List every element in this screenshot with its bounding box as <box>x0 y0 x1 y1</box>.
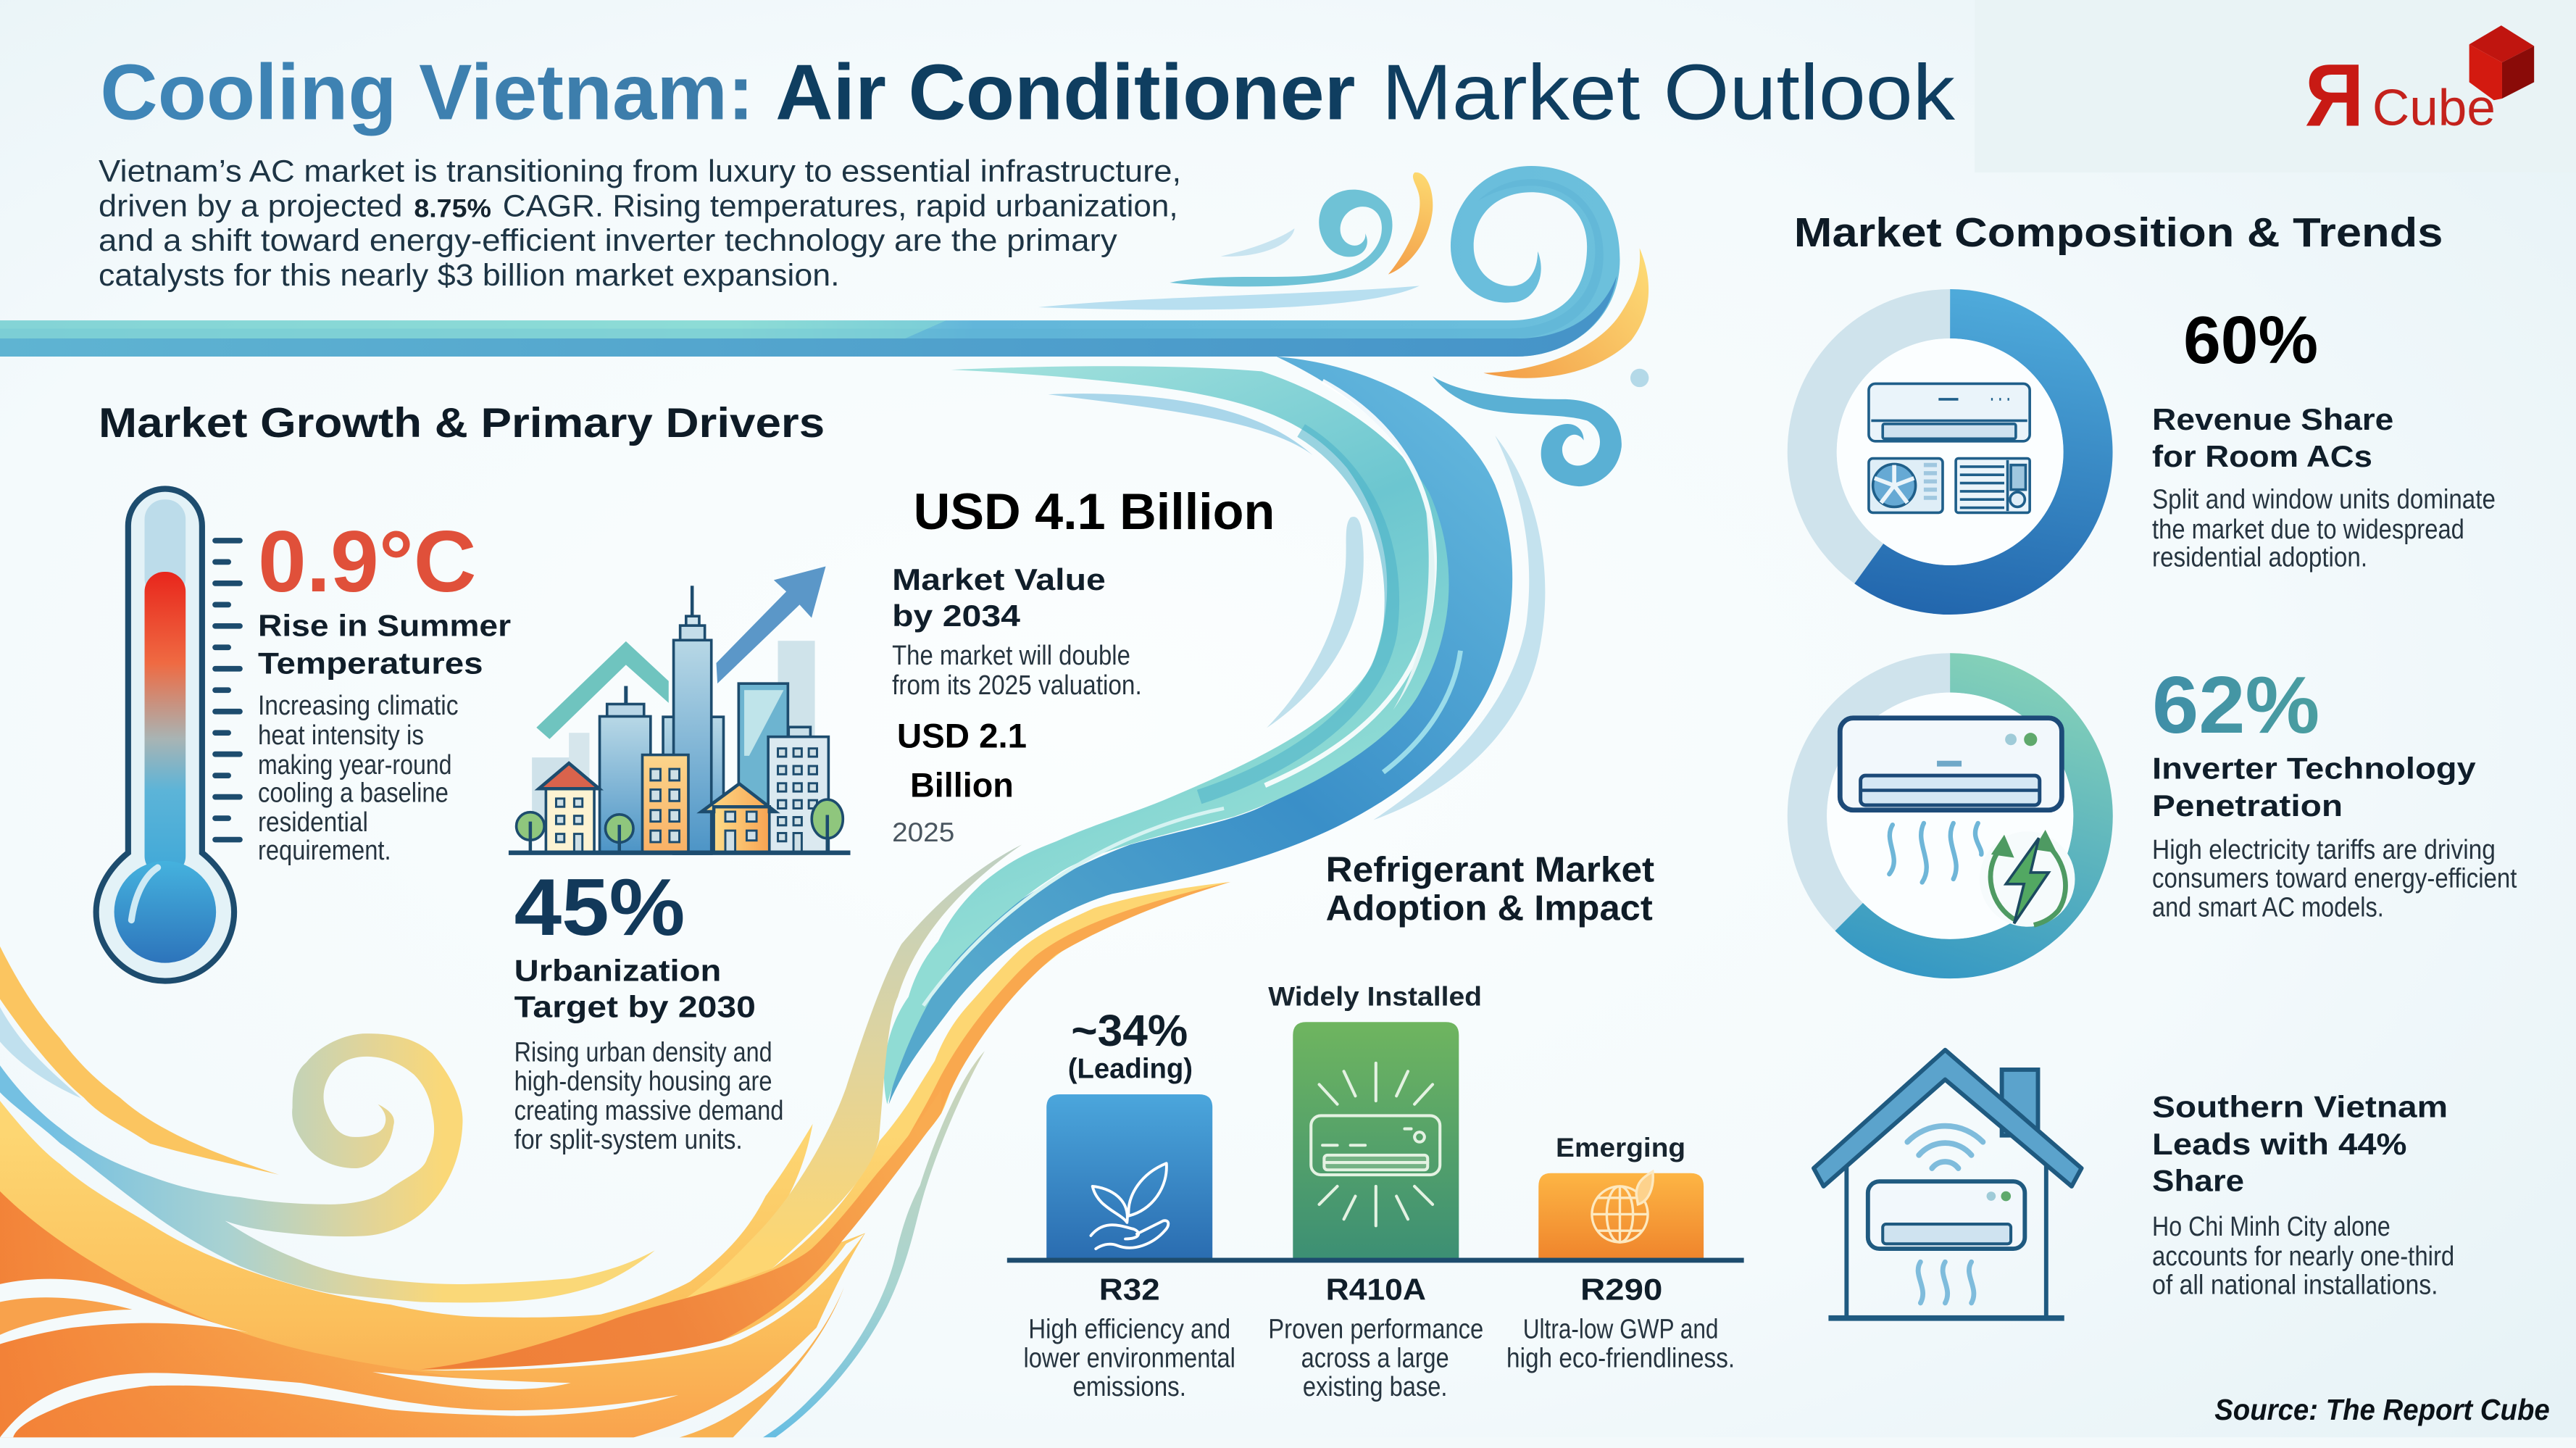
body text: for split-system units. <box>514 1125 743 1155</box>
body text: heat intensity is <box>258 720 424 751</box>
wave: pale sliver at left edge <box>0 1007 81 1098</box>
column: R290 <box>1506 1272 1735 1373</box>
panel: southern Vietnam <box>1814 1050 2454 1321</box>
panel: urbanization driver <box>509 567 851 1155</box>
icon: AC with rays <box>1311 1063 1440 1226</box>
subheading: market value by 2034 <box>892 562 1106 633</box>
subheading: revenue share: for Room ACs <box>2152 439 2372 473</box>
column: R290: Ultra-low GWP and <box>1523 1315 1719 1345</box>
logo backing panel <box>1975 0 2576 172</box>
label: ~34% (Leading) <box>1068 1006 1193 1084</box>
subheading: market value by 2034: by 2034 <box>892 599 1021 633</box>
bar chart: refrigerant adoption <box>1007 981 1744 1402</box>
panel: room AC revenue share <box>1812 302 2496 590</box>
body text: High electricity tariffs are driving <box>2152 835 2496 865</box>
subheading: southern Vietnam share: Share <box>2152 1164 2244 1198</box>
icon: thermometer <box>96 489 240 981</box>
body text <box>2152 1212 2454 1300</box>
wave: white sliver under deep orange <box>420 1234 864 1370</box>
label: ~34% (Leading): ~34% <box>1071 1006 1188 1055</box>
body text <box>892 641 1142 701</box>
intro text block: CAGR. Rising temperatures, rapid urbanization, <box>503 188 1178 223</box>
column: R290: high eco-friendliness. <box>1506 1343 1735 1373</box>
subheading: inverter penetration: Inverter Technology <box>2152 752 2476 786</box>
wave: warm base mass with gold ribbon <box>0 882 1230 1438</box>
intro text block: Vietnam’s AC market is transitioning from luxury to essential infrastructure, <box>99 154 1181 189</box>
stat: USD 4.1 Billion: USD 4.1 Billion <box>914 483 1275 540</box>
intro text block: and a shift toward energy-efficient inverter technology are the primary <box>99 223 1117 258</box>
bar: R32 <box>1046 1094 1212 1260</box>
subheading: southern Vietnam share: Leads with 44% <box>2152 1127 2406 1161</box>
heading: refrigerant adoption: Refrigerant Market <box>1326 851 1654 890</box>
stat: USD 2.1 Billion 2025: 2025 <box>892 817 954 847</box>
stat: USD 2.1 Billion 2025: Billion <box>910 767 1014 805</box>
stat: USD 2.1 Billion 2025 <box>892 717 1027 847</box>
subheading: southern Vietnam share: Southern Vietnam <box>2152 1090 2448 1124</box>
wave: orange crescent and small curl at right <box>1433 248 1648 486</box>
intro text block: driven by a projected <box>99 188 402 223</box>
panel: market value <box>892 483 1275 847</box>
intro text block: 8.75% <box>414 194 491 222</box>
icon: globe with leaf <box>1592 1172 1653 1242</box>
column: R410A: Proven performance <box>1268 1315 1483 1345</box>
subheading: urbanization target <box>514 954 756 1023</box>
column: R410A: R410A <box>1326 1272 1426 1306</box>
subheading: rise in summer temperatures: Temperatures <box>258 646 483 681</box>
body text <box>258 691 459 866</box>
subheading: inverter penetration <box>2152 752 2476 823</box>
subheading: southern Vietnam share <box>2152 1090 2448 1198</box>
body text <box>2152 485 2496 573</box>
logo wordmark <box>2305 45 2496 144</box>
wave: orange edge of gold ribbon <box>889 882 1230 1173</box>
wave: pale outer streaks <box>1048 394 1545 820</box>
subheading: rise in summer temperatures <box>258 608 511 681</box>
wave: lower flame <box>678 1287 844 1438</box>
label: ~34% (Leading): (Leading) <box>1068 1053 1193 1084</box>
wave: ribbon highlights <box>923 381 1461 1006</box>
subheading: revenue share <box>2152 402 2393 473</box>
stat: 62%: 62% <box>2152 659 2319 750</box>
icon: plant in hand <box>1091 1163 1168 1249</box>
title: Air Conditioner <box>775 48 1355 136</box>
bar: R410A <box>1293 1022 1459 1260</box>
body text: residential <box>258 807 368 838</box>
wave: thin pale tail <box>763 1051 985 1437</box>
icon: energy efficiency bolt <box>1980 830 2075 927</box>
wave: horizontal band ending in large spiral <box>0 166 1620 357</box>
wave: main blue ribbon <box>889 357 1512 1104</box>
body text: creating massive demand <box>514 1096 783 1126</box>
intro text block <box>99 154 1181 293</box>
stat: 0.9°C: 0.9°C <box>258 513 476 610</box>
wave: orange shading at lower left <box>0 1191 633 1438</box>
body text: Rising urban density and <box>514 1038 772 1068</box>
wave: teal ribbon <box>884 366 1449 1104</box>
body text: requirement. <box>258 836 391 866</box>
body text: from its 2025 valuation. <box>892 670 1142 701</box>
column: R410A <box>1268 1272 1483 1402</box>
donut: 62% <box>1807 673 2093 959</box>
body text: The market will double <box>892 641 1130 671</box>
wave: warm flame at left edge <box>0 946 279 1175</box>
column: R410A: across a large <box>1301 1343 1449 1373</box>
axis line <box>1007 1258 1744 1262</box>
panel: refrigerant market <box>1007 851 1744 1402</box>
subheading: urbanization target: Target by 2030 <box>514 989 756 1023</box>
heading: market growth: Market Growth & Primary Drivers <box>99 400 825 446</box>
panel: inverter technology <box>1807 659 2517 959</box>
stat: 45%: 45% <box>514 862 685 952</box>
label: widely installed: Widely Installed <box>1268 981 1482 1012</box>
wave: grey to gold streak <box>682 844 1022 1302</box>
body text: Split and window units dominate <box>2152 485 2496 515</box>
subheading: urbanization target: Urbanization <box>514 954 721 988</box>
column: R290: R290 <box>1580 1272 1662 1306</box>
column: R32: emissions. <box>1072 1372 1186 1402</box>
body text: consumers toward energy-efficient <box>2152 863 2517 894</box>
icon: city skyline with rising arrow <box>509 567 851 855</box>
body text: Increasing climatic <box>258 691 459 721</box>
icon: AC units <box>1869 383 2030 512</box>
body text: and smart AC models. <box>2152 892 2384 923</box>
body text: Ho Chi Minh City alone <box>2152 1212 2390 1242</box>
label: emerging: Emerging <box>1556 1132 1685 1162</box>
icon: house with AC <box>1814 1050 2082 1321</box>
wave: deep orange ribbon <box>420 1089 941 1370</box>
column: R32: High efficiency and <box>1028 1315 1230 1345</box>
heading: market composition: Market Composition & Trends <box>1794 210 2443 256</box>
donut: 60% <box>1812 314 2088 590</box>
body text: accounts for nearly one-third <box>2152 1241 2454 1272</box>
heading: refrigerant adoption: Adoption & Impact <box>1326 889 1653 928</box>
bottom page strip <box>0 1437 2576 1448</box>
body text <box>514 1038 783 1155</box>
icon: red cube <box>2469 25 2534 100</box>
body text: high-density housing are <box>514 1066 772 1097</box>
wave: small flame inside white sliver <box>0 1297 133 1335</box>
stat: 60%: 60% <box>2183 302 2318 378</box>
wave: spiral from blue to gold with long tail <box>0 1033 655 1302</box>
heading: refrigerant adoption <box>1326 851 1654 928</box>
logo wordmark: Я <box>2305 45 2364 144</box>
subheading: inverter penetration: Penetration <box>2152 789 2343 823</box>
body text: of all national installations. <box>2152 1270 2438 1300</box>
body text <box>2152 835 2517 923</box>
column: R32 <box>1023 1272 1235 1402</box>
body text: making year-round <box>258 750 451 781</box>
subheading: rise in summer temperatures: Rise in Summer <box>258 608 511 642</box>
intro text block: catalysts for this nearly $3 billion market expansion. <box>99 258 840 293</box>
wave: pale streaks and small curl above the band <box>1038 172 1433 309</box>
panel: thermometer driver <box>96 489 511 981</box>
title <box>100 48 1956 136</box>
title: Market Outlook <box>1382 48 1956 136</box>
subheading: revenue share: Revenue Share <box>2152 402 2393 436</box>
icon: inverter AC <box>1840 718 2062 883</box>
body text: the market due to widespread <box>2152 515 2464 545</box>
source note: Source: The Report Cube <box>2214 1393 2550 1426</box>
column: R32: lower environmental <box>1023 1343 1235 1373</box>
logo wordmark: Cube <box>2372 78 2496 136</box>
bar: R290 <box>1538 1173 1704 1260</box>
column: R32: R32 <box>1099 1272 1160 1306</box>
body text: cooling a baseline <box>258 778 449 808</box>
column: R410A: existing base. <box>1303 1372 1447 1402</box>
subheading: market value by 2034: Market Value <box>892 562 1106 596</box>
body text: residential adoption. <box>2152 542 2367 573</box>
wave: white slivers in warm mass <box>0 1279 678 1437</box>
title: Cooling Vietnam: <box>100 48 754 136</box>
logo: RCube <box>2305 25 2534 144</box>
stat: USD 2.1 Billion 2025: USD 2.1 <box>897 717 1027 756</box>
